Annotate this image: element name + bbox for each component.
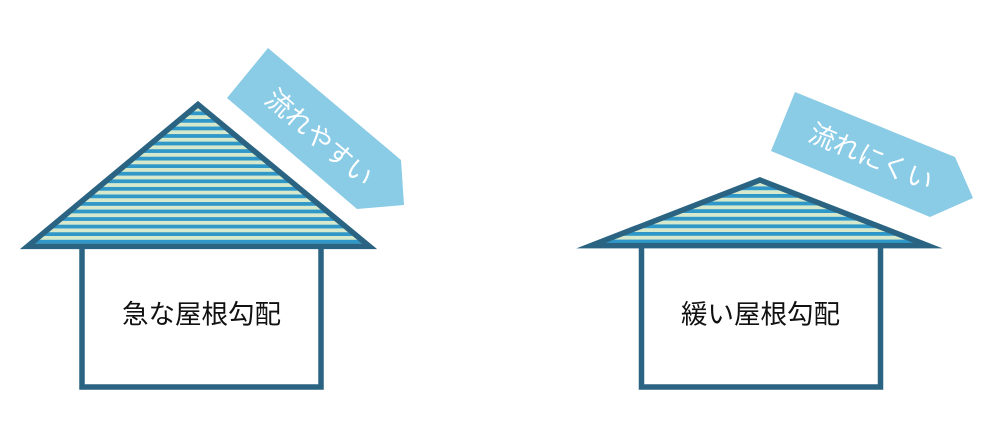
label: steep roof pitch: 急な屋根勾配 xyxy=(122,300,281,330)
arrow: flows poorly: 流れにくい xyxy=(804,118,938,197)
roof right xyxy=(591,180,928,246)
label: gentle roof pitch: 緩い屋根勾配 xyxy=(681,300,840,330)
left house: steep roof xyxy=(28,48,404,387)
arrow: flows poorly xyxy=(771,92,973,217)
roof left xyxy=(28,104,370,246)
arrow: flows easily: 流れやすい xyxy=(259,83,379,193)
right house: gentle roof xyxy=(591,92,973,387)
arrow: flows easily xyxy=(227,48,404,209)
house body right xyxy=(642,246,880,387)
house body left xyxy=(82,247,321,387)
